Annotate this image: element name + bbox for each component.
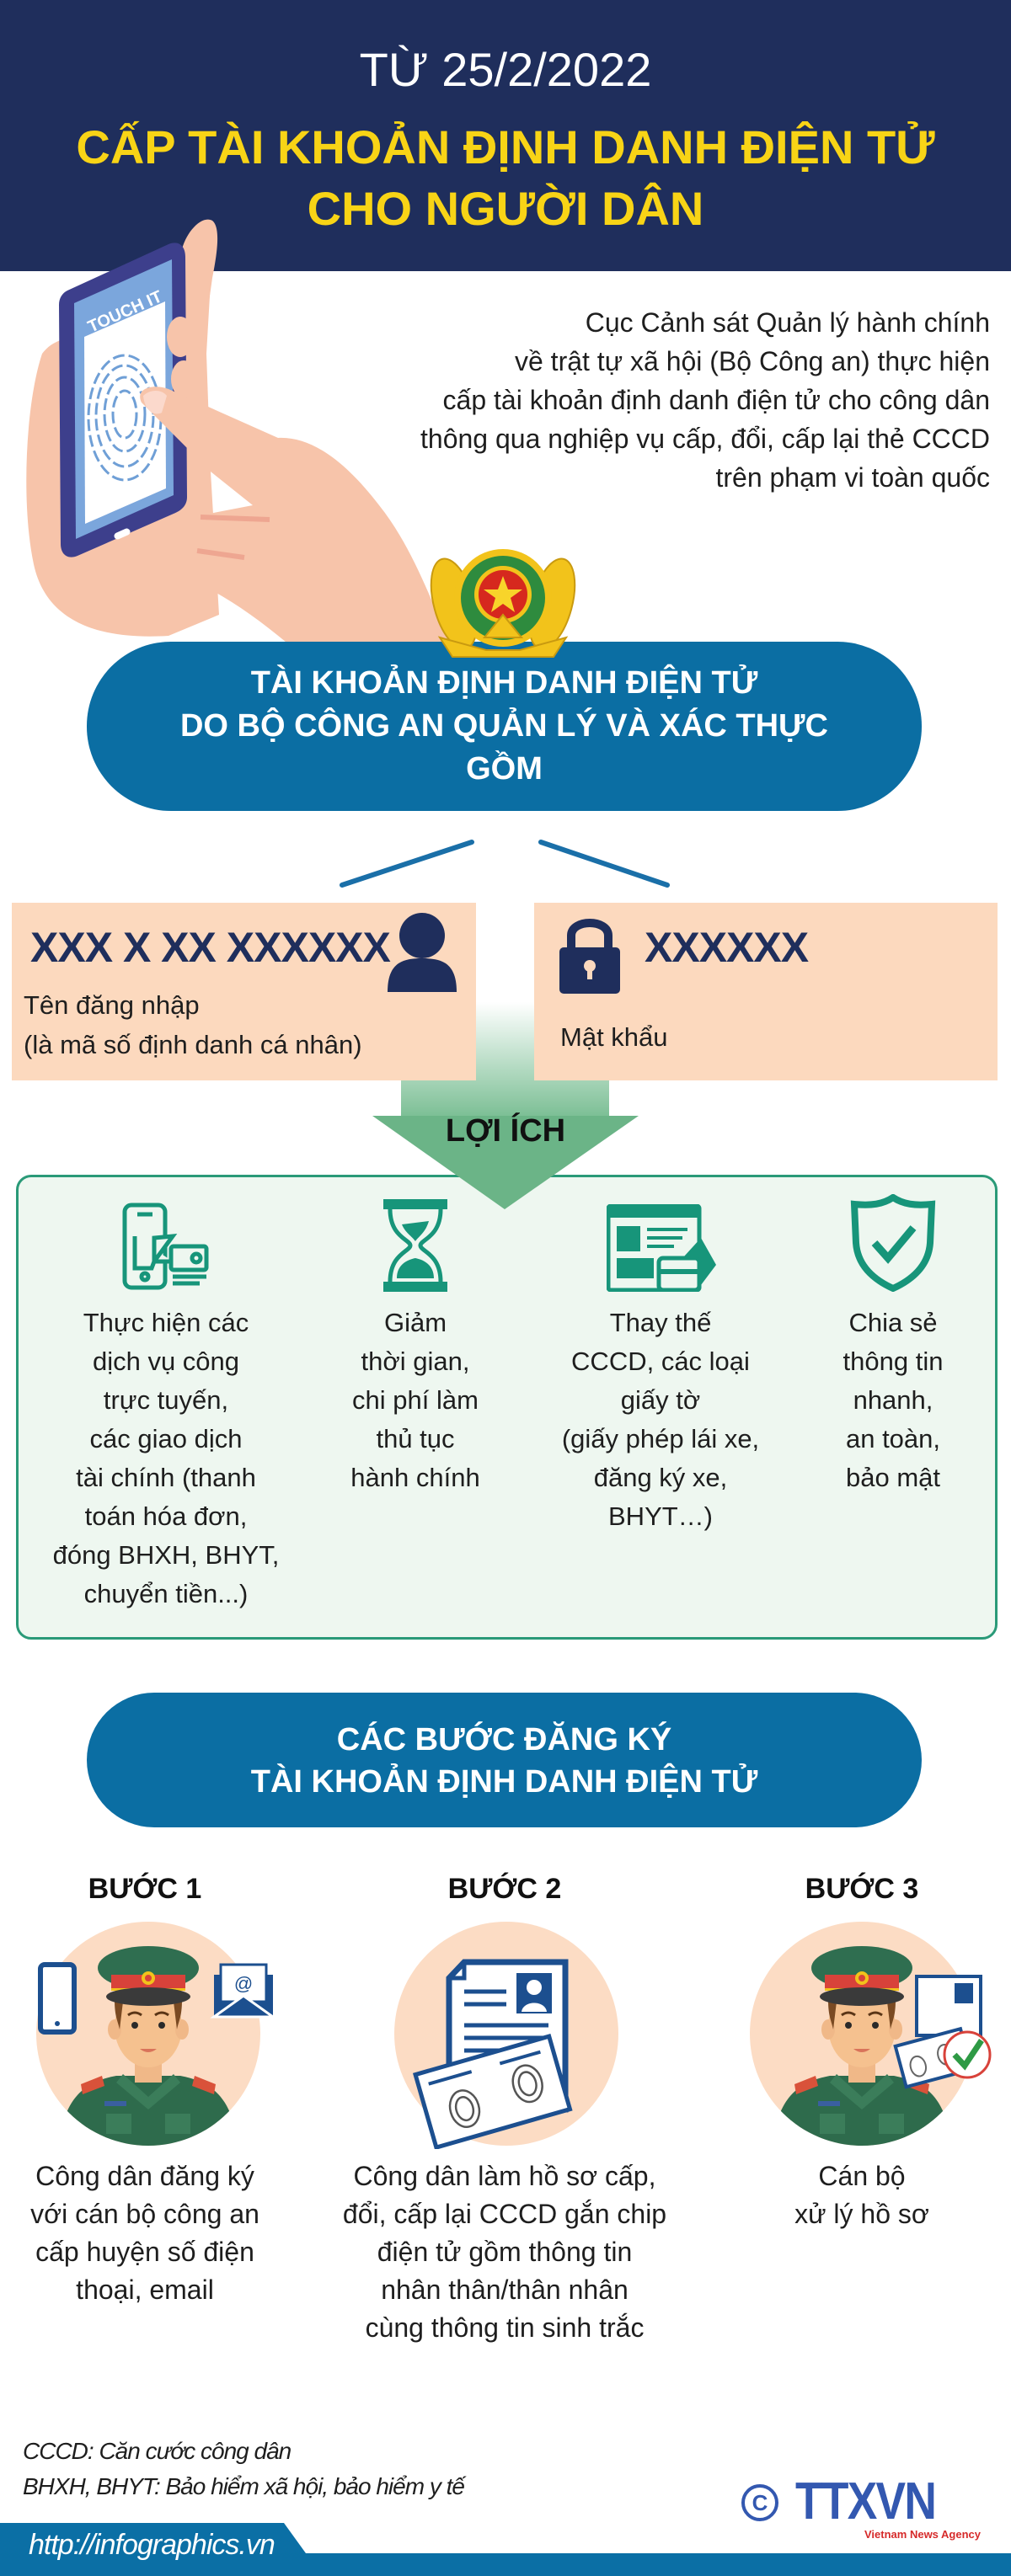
icon: documents with check	[896, 1976, 990, 2087]
icon: web documents and cards	[607, 1204, 716, 1292]
step 3 text	[794, 2161, 929, 2229]
intro paragraph: cấp tài khoản định danh điện tử cho công dân	[443, 385, 990, 415]
icon: user	[388, 913, 457, 992]
password code: XXXXXX	[645, 924, 808, 971]
username code: XXX X XX XXXXXX	[30, 924, 390, 971]
step 2 illustration	[394, 1922, 618, 2149]
logo: TTXVN: C	[752, 2490, 768, 2515]
benefit text 2: Giảm	[384, 1308, 447, 1337]
username label: (là mã số định danh cá nhân)	[24, 1030, 362, 1059]
icon: phone payment	[123, 1203, 209, 1290]
step 2 text: Công dân làm hồ sơ cấp,	[354, 2161, 655, 2191]
step 3 illustration	[750, 1922, 991, 2146]
phone: TOUCH IT	[85, 287, 165, 337]
left hand palm	[26, 230, 219, 637]
username label	[24, 990, 362, 1059]
step 3 text: Cán bộ	[818, 2161, 906, 2191]
phone	[59, 243, 187, 557]
connector lines	[340, 840, 670, 888]
step 2 text: điện tử gồm thông tin	[377, 2237, 632, 2267]
benefit text 1: trực tuyến,	[104, 1385, 228, 1415]
step 1 text	[30, 2161, 259, 2305]
pill: account managed by ministry: DO BỘ CÔNG AN QUẢN LÝ VÀ XÁC THỰC	[180, 708, 828, 744]
intro paragraph: thông qua nghiệp vụ cấp, đổi, cấp lại thẻ CCCD	[420, 424, 990, 454]
benefit text 3: đăng ký xe,	[594, 1463, 727, 1492]
fingers of left hand over phone	[167, 317, 196, 436]
icon: email	[214, 1965, 273, 2017]
icon: lock	[559, 919, 620, 994]
step 2 heading: BƯỚC 2	[448, 1873, 561, 1905]
benefit text 4: nhanh,	[853, 1385, 933, 1415]
logo: TTXVN: Vietnam News Agency	[864, 2528, 981, 2541]
main title	[76, 120, 935, 235]
right hand pointing	[140, 387, 455, 657]
benefit text 4: bảo mật	[846, 1463, 940, 1492]
benefit text 2: thời gian,	[361, 1347, 469, 1376]
footer url: http://infographics.vn	[29, 2529, 275, 2561]
step 1 text: Công dân đăng ký	[35, 2161, 254, 2191]
footnotes: BHXH, BHYT: Bảo hiểm xã hội, bảo hiểm y tế	[23, 2473, 464, 2499]
password label: Mật khẩu	[560, 1022, 668, 1052]
intro paragraph: về trật tự xã hội (Bộ Công an) thực hiện	[515, 346, 990, 376]
benefit text 2: chi phí làm	[352, 1385, 479, 1415]
panel: password	[534, 903, 998, 1080]
step 1 heading: BƯỚC 1	[88, 1873, 201, 1905]
pill: registration steps: TÀI KHOẢN ĐỊNH DANH ĐIỆN TỬ	[251, 1764, 757, 1800]
intro paragraph: Cục Cảnh sát Quản lý hành chính	[586, 307, 990, 338]
icon: shield check	[851, 1194, 935, 1292]
benefit text 1	[53, 1308, 279, 1608]
heading: benefits: LỢI ÍCH	[446, 1113, 565, 1149]
logo: TTXVN: TTXVN	[795, 2472, 935, 2531]
date heading: TỪ 25/2/2022	[360, 43, 651, 96]
benefit text 4: thông tin	[843, 1347, 943, 1376]
arrow: benefits	[372, 1009, 639, 1209]
fingerprint card	[415, 2036, 570, 2147]
icon: hourglass	[383, 1199, 447, 1292]
document	[449, 1962, 565, 2109]
step 1 illustration	[36, 1922, 273, 2146]
benefit text 1: dịch vụ công	[93, 1347, 239, 1376]
step 1 text: cấp huyện số điện	[35, 2237, 254, 2267]
step 1 text: với cán bộ công an	[30, 2199, 259, 2229]
icon: email: @	[234, 1973, 253, 1994]
pill: account managed by ministry: TÀI KHOẢN ĐỊNH DANH ĐIỆN TỬ	[251, 665, 757, 701]
footer bar	[0, 2523, 1011, 2576]
step 2 text	[343, 2161, 666, 2343]
intro paragraph: trên phạm vi toàn quốc	[715, 462, 990, 493]
step 3 heading: BƯỚC 3	[805, 1873, 918, 1905]
intro paragraph	[420, 307, 990, 493]
logo: TTXVN	[741, 2472, 981, 2541]
benefit text 1: tài chính (thanh	[76, 1463, 256, 1492]
icon: police emblem	[430, 549, 576, 658]
benefit text 1: đóng BHXH, BHYT,	[53, 1540, 279, 1570]
hand illustration	[26, 219, 447, 642]
step 2 text: đổi, cấp lại CCCD gắn chip	[343, 2199, 666, 2229]
username label: Tên đăng nhập	[24, 990, 200, 1020]
step 1 text: thoại, email	[76, 2275, 214, 2305]
benefit text 3	[562, 1308, 759, 1531]
main title: CẤP TÀI KHOẢN ĐỊNH DANH ĐIỆN TỬ	[76, 120, 935, 173]
benefit text 1: chuyển tiền...)	[84, 1579, 248, 1608]
panel: benefits	[16, 1175, 998, 1640]
benefit text 2: thủ tục	[376, 1424, 455, 1453]
benefit text 2	[350, 1308, 480, 1492]
benefit text 3: Thay thế	[610, 1308, 711, 1337]
step 2 text: nhân thân/thân nhân	[381, 2275, 629, 2305]
benefit text 3: (giấy phép lái xe,	[562, 1424, 759, 1453]
benefit text 4: Chia sẻ	[848, 1308, 938, 1337]
benefit text 2: hành chính	[350, 1463, 480, 1492]
step 2 text: cùng thông tin sinh trắc	[366, 2312, 644, 2343]
icon: phone	[40, 1965, 74, 2032]
panel: username	[12, 903, 476, 1080]
benefit text 1: Thực hiện các	[83, 1308, 249, 1337]
pill: registration steps	[87, 1693, 922, 1827]
step 3 text: xử lý hồ sơ	[794, 2199, 929, 2229]
benefit text 3: CCCD, các loại	[571, 1347, 750, 1376]
benefit text 4: an toàn,	[846, 1424, 940, 1453]
thumb	[175, 220, 217, 362]
benefit text 3: giấy tờ	[621, 1385, 700, 1415]
footnotes	[23, 2438, 467, 2499]
benefit text 1: các giao dịch	[90, 1424, 242, 1453]
benefit text 3: BHYT…)	[608, 1501, 713, 1531]
main title: CHO NGƯỜI DÂN	[308, 182, 703, 235]
footnotes: CCCD: Căn cước công dân	[23, 2438, 291, 2464]
benefit text 4	[842, 1308, 943, 1492]
header background	[0, 0, 1011, 271]
benefit text 1: toán hóa đơn,	[85, 1501, 247, 1531]
pill: account managed by ministry: GỒM	[466, 751, 543, 787]
pill: account managed by ministry	[87, 642, 922, 811]
pill: registration steps: CÁC BƯỚC ĐĂNG KÝ	[337, 1722, 671, 1757]
